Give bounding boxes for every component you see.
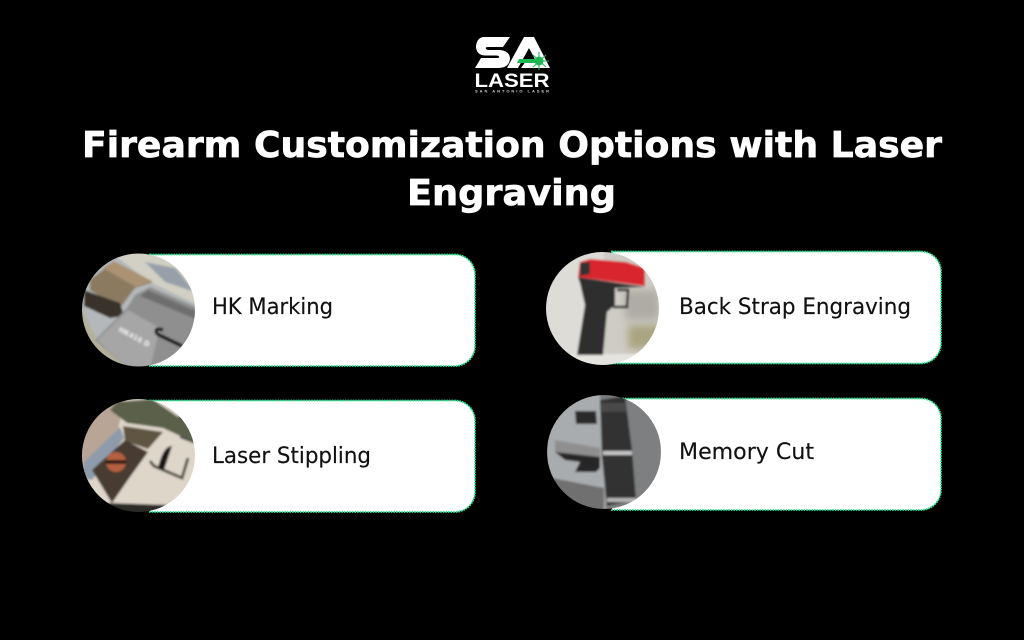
logo tagline: SAN ANTONIO LASER bbox=[475, 88, 549, 94]
title bbox=[82, 125, 942, 214]
photo: pistol with red slide bbox=[544, 250, 662, 368]
card background bbox=[150, 254, 475, 366]
logo wordmark: LASER bbox=[474, 71, 550, 92]
panel: Back Strap Engraving bbox=[544, 250, 941, 368]
photo: camo pistol with stippled grip bbox=[82, 399, 195, 512]
card background bbox=[612, 252, 941, 364]
photo: HK rifle receiver bbox=[80, 252, 198, 368]
label: Memory Cut bbox=[679, 440, 814, 465]
label: HK Marking bbox=[212, 295, 333, 320]
card background bbox=[150, 400, 475, 512]
panel: Laser Stippling bbox=[80, 397, 475, 520]
logo: SA Laser bbox=[474, 37, 550, 94]
panel: HK Marking bbox=[80, 252, 475, 368]
logo laser beam bbox=[517, 52, 549, 70]
photo: HK rifle receiver: HK416 D bbox=[117, 326, 151, 349]
panel: Memory Cut bbox=[546, 394, 941, 510]
label: Back Strap Engraving bbox=[679, 295, 911, 320]
title: Firearm Customization Options with Laser bbox=[82, 125, 942, 166]
photo: pistols in foam cutouts bbox=[546, 394, 662, 510]
logo letter S bbox=[475, 37, 510, 68]
title: Engraving bbox=[407, 173, 616, 214]
card background bbox=[612, 398, 941, 510]
logo letter A bbox=[507, 37, 550, 68]
label: Laser Stippling bbox=[212, 444, 371, 469]
